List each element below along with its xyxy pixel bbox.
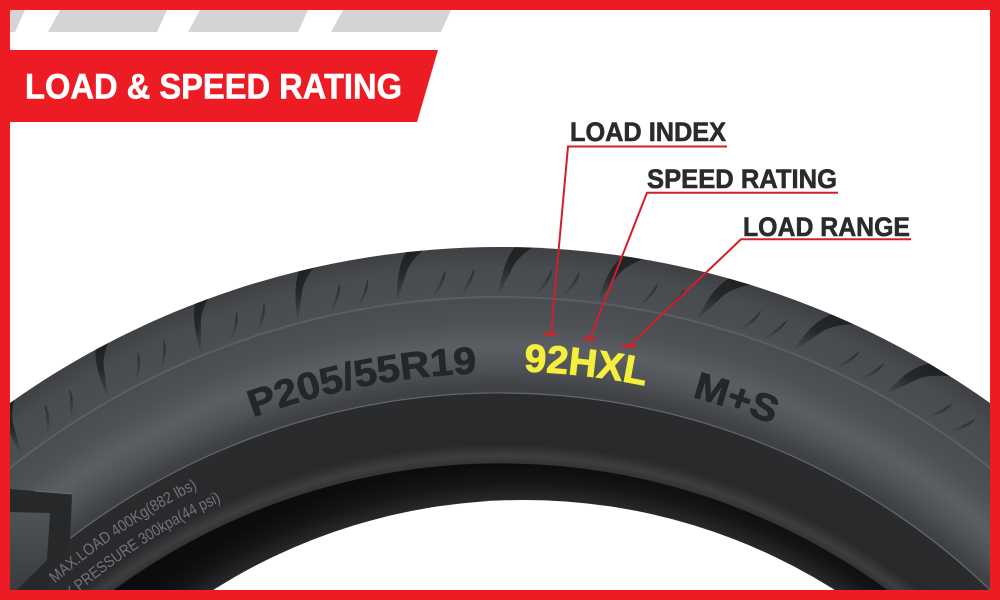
speed rating label: SPEED RATING (647, 164, 837, 194)
top stripes (10, 10, 451, 32)
max pressure text: Y PRESSURE 300kpa(44 psi) (68, 492, 220, 590)
mud and snow marking: M+S (694, 372, 778, 422)
load index label: LOAD INDEX (570, 117, 726, 147)
load index label (544, 117, 727, 334)
tire size marking: P205/55R19 (246, 347, 475, 417)
speed rating label (583, 164, 838, 339)
load range label: LOAD RANGE (743, 212, 910, 242)
wheel opening (198, 500, 850, 600)
max load text: MAX.LOAD 400Kg(882 lbs) (48, 480, 196, 583)
highlighted code: 92HXL (526, 344, 646, 386)
load range label (622, 212, 911, 346)
wheel well (100, 463, 900, 600)
tread blocks (0, 247, 976, 453)
title banner (10, 50, 438, 122)
tire illustration (0, 247, 1000, 600)
chevron emblem (10, 489, 72, 590)
sidewall (0, 297, 1000, 600)
lower sidewall band (0, 393, 1000, 600)
title banner: LOAD & SPEED RATING (25, 68, 402, 106)
tread band (0, 247, 1000, 600)
